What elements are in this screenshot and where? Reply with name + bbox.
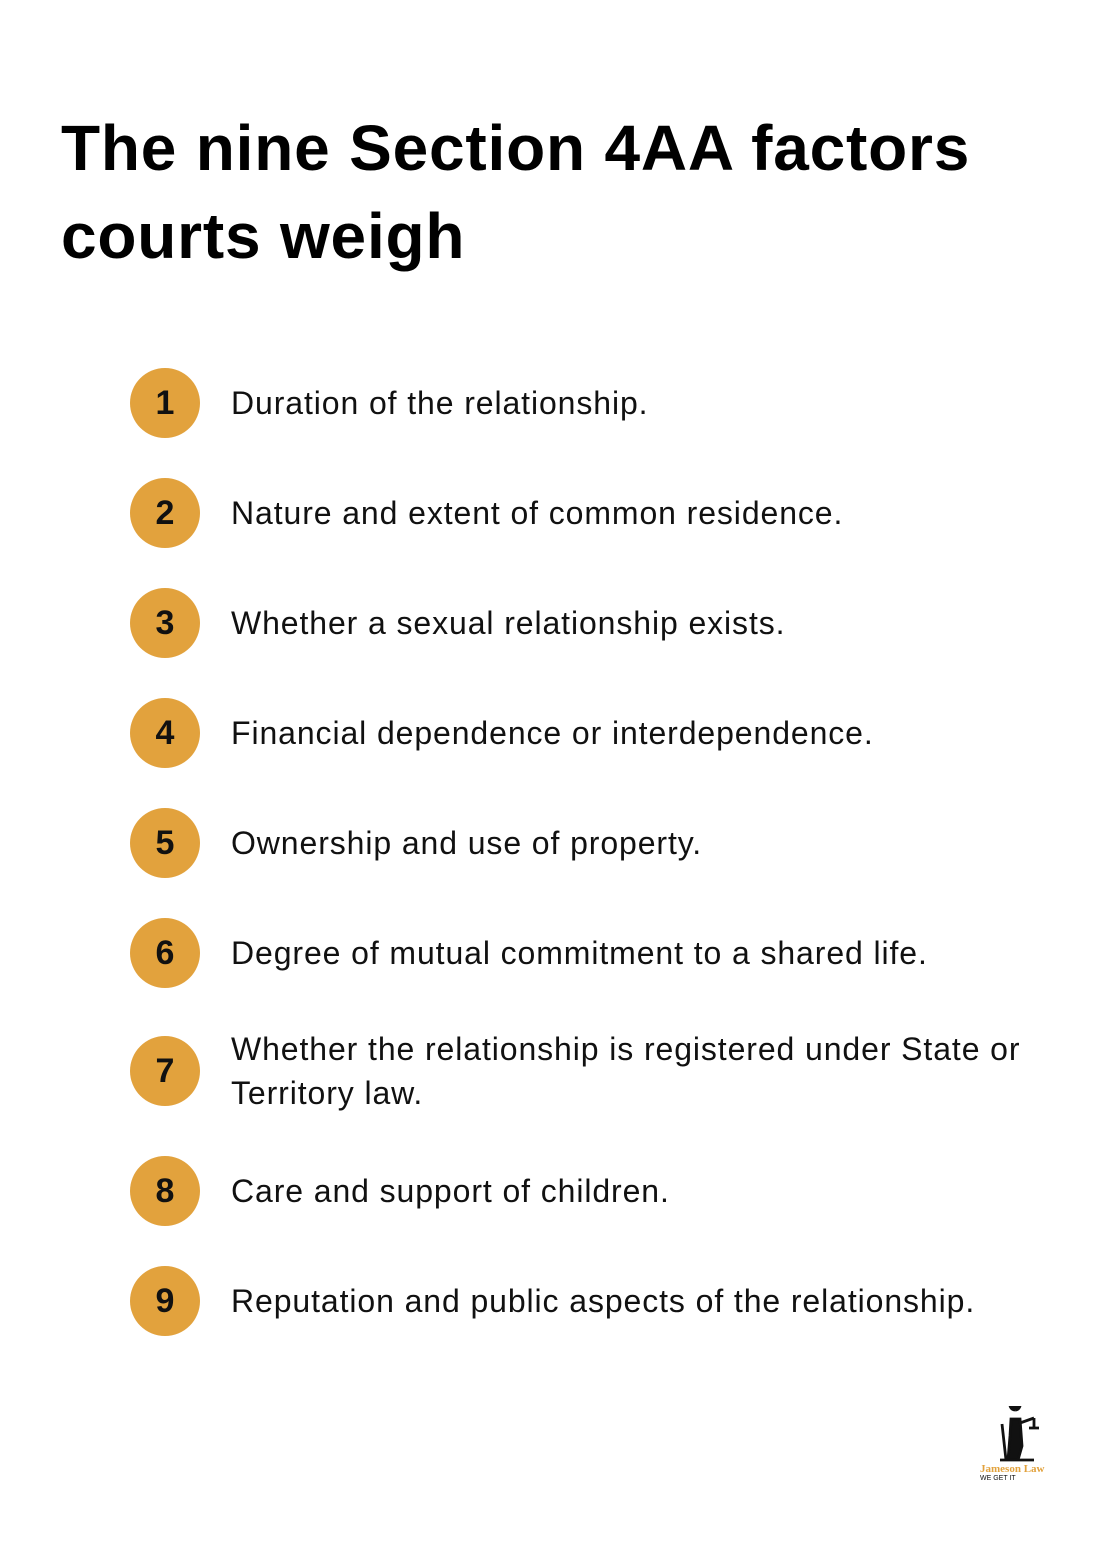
item 9 (130, 1266, 975, 1336)
item 3 (130, 588, 785, 658)
logo (980, 1406, 1044, 1482)
logo text: Jameson Law (980, 1463, 1044, 1475)
item 9: Reputation and public aspects of the relationship. (231, 1283, 975, 1319)
item 7: Whether the relationship is registered under State or (231, 1031, 1020, 1067)
item 7 (130, 1031, 1020, 1111)
item 3: Whether a sexual relationship exists. (231, 605, 785, 641)
item 6 (130, 918, 928, 988)
item 3: 3 (156, 604, 174, 642)
item 4: 4 (156, 714, 174, 752)
icon: justice figure (1000, 1406, 1039, 1462)
item 8: 8 (156, 1172, 174, 1210)
item 8 (130, 1156, 670, 1226)
item 5: Ownership and use of property. (231, 825, 702, 861)
item 9: 9 (156, 1282, 174, 1320)
item 5: 5 (156, 824, 174, 862)
item 2 (130, 478, 843, 548)
item 5 (130, 808, 702, 878)
item 4: Financial dependence or interdependence. (231, 715, 874, 751)
item 2: Nature and extent of common residence. (231, 495, 843, 531)
title: The nine Section 4AA factors (61, 112, 970, 184)
item 1: 1 (156, 384, 174, 422)
item 7: 7 (156, 1052, 174, 1090)
item 7: Territory law. (231, 1075, 423, 1111)
item 2: 2 (156, 494, 174, 532)
item 6: Degree of mutual commitment to a shared life. (231, 935, 928, 971)
title: courts weigh (61, 200, 465, 272)
item 1: Duration of the relationship. (231, 385, 648, 421)
title (61, 112, 970, 272)
item 4 (130, 698, 874, 768)
logo: WE GET IT (980, 1475, 1016, 1482)
item 6: 6 (156, 934, 174, 972)
item 1 (130, 368, 648, 438)
item 8: Care and support of children. (231, 1173, 670, 1209)
